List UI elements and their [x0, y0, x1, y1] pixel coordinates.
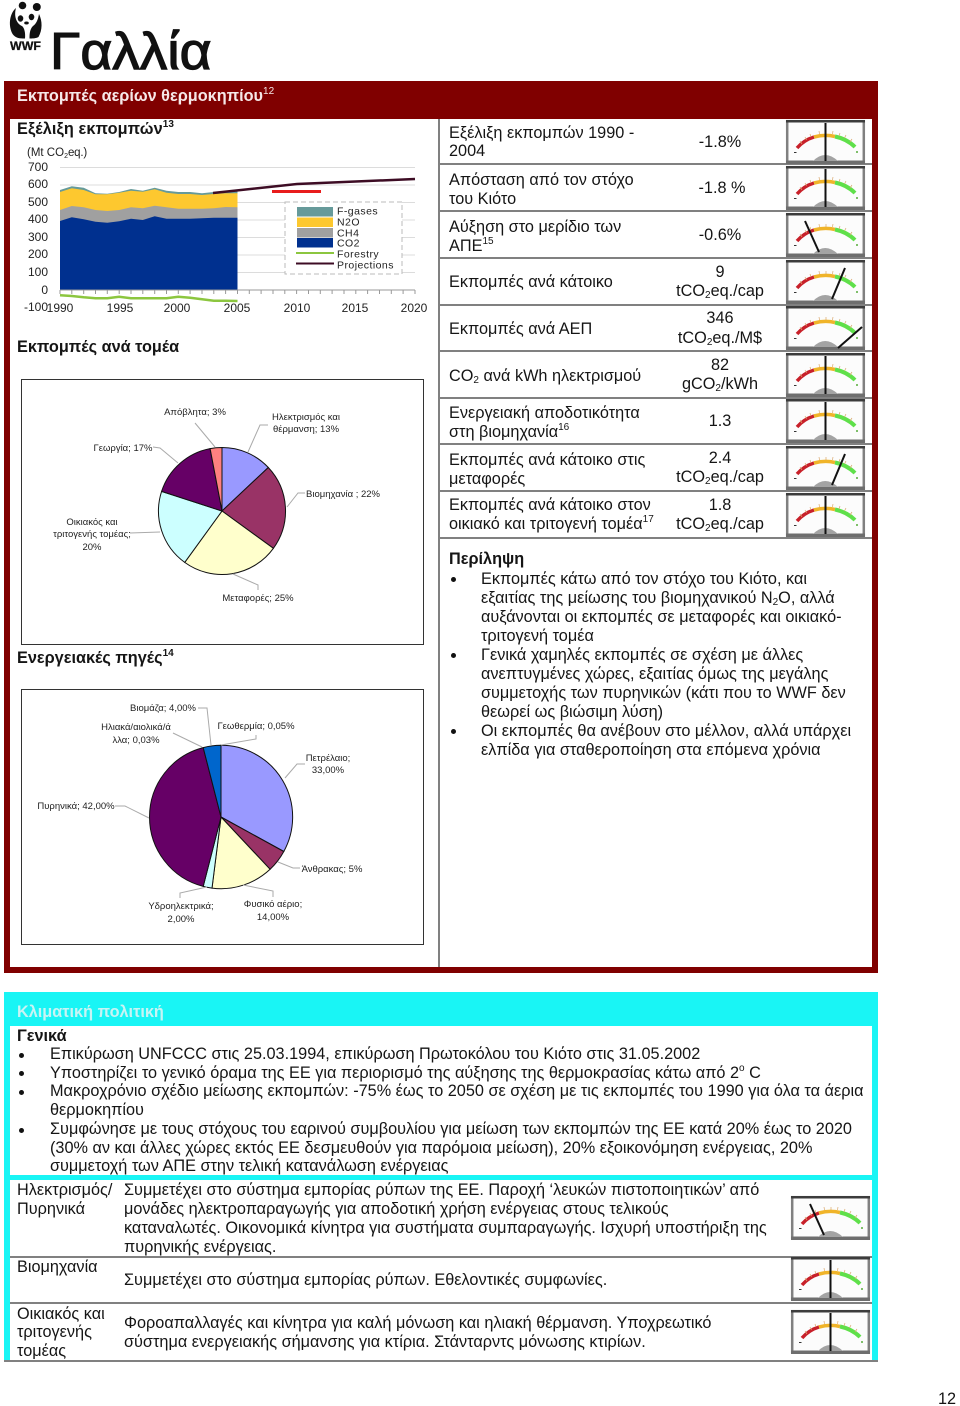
pie chart: energy sources: Άνθρακας; 5%	[302, 864, 363, 875]
heading: emissions by sector: Εκπομπές ανά τομέα	[17, 338, 179, 356]
series: CO2	[60, 216, 238, 290]
sector policy table	[17, 1181, 767, 1360]
indicator table: 2.4	[709, 449, 731, 467]
sector policy table: Οικιακός και	[17, 1305, 105, 1323]
summary text block: Γενικά χαμηλές εκπομπές σε σχέση με άλλες	[481, 646, 803, 664]
series: Forestry	[60, 295, 238, 301]
pie chart: energy sources: Βιομάζα; 4,00%	[130, 703, 197, 714]
pie chart: energy sources: 33,00%	[312, 765, 345, 776]
x axis labels	[47, 301, 428, 315]
indicator table: tCO2eq./M$	[678, 329, 762, 348]
icon: gauge emissions per capita	[786, 260, 865, 304]
pie chart: energy sources: λλα; 0,03%	[112, 735, 160, 746]
indicator table: 2004	[449, 142, 485, 160]
x axis labels: 2000	[164, 301, 191, 315]
sector policy table: πυρηνικής ενέργειας.	[124, 1238, 276, 1256]
y axis labels: 200	[28, 247, 48, 261]
indicator table: Εκπομπές ανά ΑΕΠ	[449, 320, 592, 338]
summary text block: εξαιτίας της μείωσης του βιομηχανικού N2O, αλλά	[481, 589, 835, 608]
indicator table: στη βιομηχανία16	[449, 422, 569, 441]
sector policy table: Βιομηχανία	[17, 1258, 98, 1276]
y axis labels: 100	[28, 265, 48, 279]
y axis labels: 0	[41, 283, 48, 297]
indicator table: -1.8 %	[698, 179, 746, 197]
icon: gauge renewables share	[786, 213, 865, 257]
title: Γαλλία	[50, 23, 211, 81]
panel: greenhouse gas emissions content area	[10, 119, 872, 967]
y axis labels: 300	[28, 230, 48, 244]
sector policy table: Συμμετέχει στο σύστημα εμπορίας ρύπων της ΕΕ. Παροχή ‘λευκών πιστοποιητικών’ από	[124, 1181, 759, 1199]
indicator table: tCO2eq./cap	[676, 515, 764, 534]
pie chart: emissions by sector: Γεωργία; 17%	[94, 443, 153, 454]
indicator table: του Κιότο	[449, 190, 516, 208]
summary text block: ελπίδα για σταθεροποίηση στα επόμενα χρόνια	[481, 741, 821, 759]
y axis labels	[24, 160, 48, 314]
icon: gauge electricity policy	[791, 1196, 870, 1240]
y axis labels: 600	[28, 177, 48, 191]
sector policy table: καταναλωτές. Οικονομικά κίνητρα για συστήματα συμπαραγωγής. Ισχυρή υποστήριξη της	[124, 1219, 767, 1237]
series: N2O	[60, 188, 238, 290]
heading: greenhouse gas emissions: Εκπομπές αερίων θερμοκηπίου12	[17, 86, 274, 105]
y axis labels: 500	[28, 195, 48, 209]
heading: climate policy: Κλιματική πολιτική	[17, 1003, 164, 1021]
icon: gauge residential emissions	[786, 493, 865, 537]
heading: emissions evolution: Εξέλιξη εκπομπών13	[17, 119, 174, 138]
indicator table: 1.8	[709, 496, 731, 514]
area chart: emissions evolution	[24, 147, 428, 315]
pie chart: energy sources: 14,00%	[257, 912, 290, 923]
sector policy table: σύστημα ενεργειακής σήμανσης για κτίρια. Στάνταρντς μόνωσης κτιρίων.	[124, 1333, 646, 1351]
icon: gauge CO2 per kWh	[786, 353, 865, 397]
pie chart: energy sources: Γεωθερμία; 0,05%	[217, 721, 295, 732]
pie chart: emissions by sector: τριτογενής τομέας;	[53, 529, 131, 540]
pie chart: emissions by sector: Βιομηχανία ; 22%	[306, 489, 381, 500]
pie chart: energy sources: 2,00%	[168, 914, 195, 925]
indicator table: Απόσταση από τον στόχο	[449, 171, 634, 189]
x axis labels: 2010	[284, 301, 311, 315]
general policy text block: θερμοκηπίου	[50, 1101, 144, 1119]
general policy text block: Επικύρωση UNFCCC στις 25.03.1994, επικύρωση Πρωτοκόλου του Κιότο στις 31.05.2002	[50, 1045, 700, 1063]
summary text block	[449, 550, 851, 759]
general policy text block: Γενικά	[17, 1027, 67, 1045]
x axis labels: 1995	[107, 301, 134, 315]
pie chart: emissions by sector: Μεταφορές; 25%	[222, 593, 294, 604]
sector policy table: τομέας	[17, 1342, 66, 1360]
Kyoto target marker	[272, 190, 321, 193]
legend: CO2	[337, 238, 360, 250]
sector policy table: τριτογενής	[17, 1323, 92, 1341]
pie chart: emissions by sector: Απόβλητα; 3%	[164, 407, 226, 418]
x axis labels: 1990	[47, 301, 74, 315]
indicator table: gCO2/kWh	[682, 375, 758, 394]
icon: gauge emissions evolution	[786, 120, 865, 164]
icon: gauge industry efficiency	[786, 399, 865, 443]
general policy text block: Συμφώνησε με τους στόχους του εαρινού συμβουλίου για μείωση των εκπομπών της ΕΕ κατά 20% έως το 2020	[50, 1120, 852, 1138]
series: CH4	[60, 206, 238, 290]
summary text block: Εκπομπές κάτω από τον στόχο του Κιότο, και	[481, 570, 807, 588]
indicator table: tCO2eq./cap	[676, 468, 764, 487]
sector policy table: Πυρηνικά	[17, 1200, 85, 1218]
indicator table: -1.8%	[699, 133, 741, 151]
icon: gauge residential policy	[791, 1310, 870, 1354]
summary text block: συμμετοχής των πυρηνικών (κάτι που το WWF δεν	[481, 684, 846, 702]
indicator table: 82	[711, 356, 729, 374]
x axis labels: 2015	[342, 301, 369, 315]
pie chart: emissions by sector: Ηλεκτρισμός και	[272, 412, 340, 423]
x axis labels: 2020	[401, 301, 428, 315]
indicator table: Εκπομπές ανά κάτοικο στον	[449, 496, 651, 514]
legend: F-gases	[337, 206, 378, 218]
indicator table: 9	[715, 263, 725, 281]
y axis labels: 700	[28, 160, 48, 174]
indicator table: -0.6%	[699, 226, 741, 244]
indicator table: 346	[706, 309, 734, 327]
summary text block: Οι εκπομπές θα ανέβουν στο μέλλον, αλλά υπάρχει	[481, 722, 851, 740]
divider between charts and indicators	[438, 119, 440, 967]
icon: gauge industry policy	[791, 1257, 870, 1301]
pie chart: emissions by sector: Οικιακός και	[66, 517, 118, 528]
indicator table: Αύξηση στο μερίδιο των	[449, 218, 621, 236]
legend: CH4	[337, 228, 359, 240]
summary text block: ανεπτυγμένες χώρες, εξαιτίας όμως της μεγάλης	[481, 665, 828, 683]
general policy text block: Υποστηρίζει το γενικό όραμα της ΕΕ για περιορισμό της αύξησης της θερμοκρασίας κάτω από 2o C	[50, 1063, 761, 1082]
indicator table: tCO2eq./cap	[676, 282, 764, 301]
y axis labels: 400	[28, 212, 48, 226]
sector policy table: μονάδες ηλεκτροπαραγωγής για αποδοτική χρήση ενέργειας στους τελικούς	[124, 1200, 669, 1218]
indicator table: Εξέλιξη εκπομπών 1990 -	[449, 124, 634, 142]
legend: N2O	[337, 216, 360, 228]
sector policy table: Συμμετέχει στο σύστημα εμπορίας ρύπων. Εθελοντικές συμφωνίες.	[124, 1271, 607, 1289]
y axis labels: -100	[24, 300, 48, 314]
summary text block: Περίληψη	[449, 550, 524, 568]
indicator table: CO2 ανά kWh ηλεκτρισμού	[449, 367, 641, 386]
panel: greenhouse gas emissions frame	[4, 81, 878, 973]
general policy text block: (30% αν και άλλες χώρες εκτός ΕΕ δεσμευθούν για παρόμοια μείωση), 20% εξοικονόμηση ενέργειας, 20%	[50, 1139, 812, 1157]
indicator table: ΑΠΕ15	[449, 236, 494, 255]
indicator table: μεταφορές	[449, 470, 525, 488]
icon: gauge transport emissions	[786, 446, 865, 490]
series: F-gases	[60, 186, 238, 290]
indicator table: 1.3	[709, 412, 731, 430]
y unit label: eq.)	[68, 147, 87, 159]
pie chart: energy sources: Ηλιακά/αιολικά/ά	[101, 722, 171, 733]
y unit label: 2	[64, 153, 68, 160]
indicator table: Εκπομπές ανά κάτοικο	[449, 273, 613, 291]
pie chart: emissions by sector	[22, 380, 424, 644]
icon: gauge emissions per GDP	[786, 306, 865, 350]
pie chart: emissions by sector: θέρμανση; 13%	[273, 424, 340, 435]
panel: climate policy sector area	[10, 1180, 872, 1360]
legend	[285, 202, 402, 274]
sector policy table: Ηλεκτρισμός/	[17, 1181, 112, 1199]
pie chart: energy sources: Φυσικό αέριο;	[244, 899, 302, 910]
indicator table: Ενεργειακή αποδοτικότητα	[449, 404, 640, 422]
icon: WWF panda logo: WWF	[10, 39, 41, 53]
icon: gauge Kyoto distance	[786, 166, 865, 210]
general policy text block: Μακροχρόνιο σχέδιο μείωσης εκπομπών: -75% έως το 2050 σε σχέση με τις εκπομπές του 1990 για όλα τα άερια	[50, 1082, 863, 1100]
pie chart: energy sources: Πετρέλαιο;	[306, 753, 350, 764]
indicator table: οικιακό και τριτογενή τομέα17	[449, 514, 654, 533]
heading: energy sources: Ενεργειακές πηγές14	[17, 648, 174, 667]
general policy text block	[17, 1027, 863, 1175]
pie chart: energy sources	[22, 690, 424, 944]
summary text block: τριτογενή τομέα	[481, 627, 594, 645]
legend: Forestry	[337, 248, 379, 260]
series: Projections	[213, 179, 415, 193]
pie chart: emissions by sector: 20%	[82, 542, 102, 553]
legend: Projections	[337, 260, 394, 272]
general policy text block: συμμετοχή των ΑΠΕ στην τελική κατανάλωση ενέργειας	[50, 1157, 449, 1175]
indicator table	[449, 124, 764, 534]
y unit label: (Mt CO	[27, 147, 64, 159]
pie chart: energy sources: Υδροηλεκτρικά;	[148, 901, 214, 912]
x axis labels: 2005	[224, 301, 251, 315]
summary text block: αυξάνονται οι εκπομπές σε μεταφορές και οικιακό-	[481, 608, 842, 626]
sector policy table: Φοροαπαλλαγές και κίνητρα για καλή μόνωση και ηλιακή θέρμανση. Υποχρεωτικό	[124, 1314, 711, 1332]
panel: climate policy general area	[10, 1026, 872, 1175]
pie chart: energy sources: Πυρηνικά; 42,00%	[37, 801, 115, 812]
summary text block: θεωρεί ως βιώσιμη λύση)	[481, 703, 663, 721]
indicator table: Εκπομπές ανά κάτοικο στις	[449, 451, 645, 469]
icon: WWF panda logo	[10, 2, 42, 53]
panel: climate policy frame	[4, 992, 878, 1361]
